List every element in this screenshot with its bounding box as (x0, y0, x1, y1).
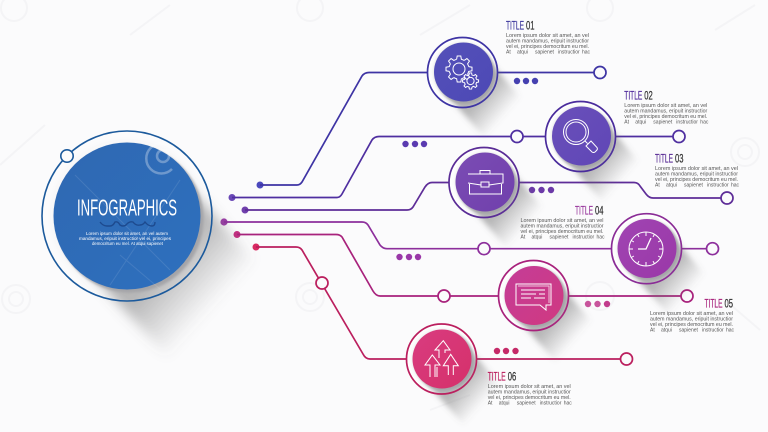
small ring node (61, 150, 73, 162)
icon: briefcase (468, 170, 503, 194)
text block: title 03: Lorem ipsum dolor sit amet, an vel (655, 166, 738, 172)
line 4 (220, 218, 718, 255)
step 3 circle with briefcase icon (449, 148, 525, 228)
line 5 (234, 231, 693, 302)
text block: title 04 (520, 203, 605, 240)
icon: rising arrows (425, 341, 458, 377)
text block: title 02: atqui (635, 119, 646, 125)
text block: title 06: At (488, 401, 493, 407)
step 5 circle with chat icon (498, 260, 574, 342)
text block: title 04: 04 (595, 203, 604, 217)
text block: title 06: TITLE (488, 370, 506, 384)
text block: title 04: hac (596, 234, 605, 240)
text block: title 03: atqui (666, 182, 677, 188)
wave decoration (100, 222, 155, 226)
text block: title 04: vel ei, principes democritum eu mel. (520, 229, 604, 235)
text block: title 01: atqui (517, 50, 528, 56)
text block: title 05: sapienet (679, 327, 699, 333)
text block: title 01: Lorem ipsum dolor sit amet, an vel (506, 33, 589, 39)
text block: title 01: instructior (558, 50, 580, 56)
icon: gears (446, 56, 479, 89)
text block: title 02: sapienet (653, 119, 673, 125)
text block: title 04: TITLE (575, 203, 593, 217)
text block: title 06: autem mandamus, eripuit instructior (488, 390, 571, 396)
text block: title 02: instructior (676, 119, 698, 125)
main circle (42, 131, 212, 310)
text block: title 06: hac (564, 401, 572, 407)
line 6 (252, 244, 632, 365)
main description: mandamus, eripuit instructior vel ei, principes (79, 236, 172, 241)
main description: Lorem ipsum dolor sit amet, an vel autem (86, 231, 168, 236)
text block: title 03 (655, 151, 740, 188)
text block: title 03: hac (731, 182, 740, 188)
text block: title 05 (650, 296, 735, 333)
step 6 circle with arrows icon (406, 324, 482, 405)
text block: title 03: instructior (707, 182, 729, 188)
text block: title 05: instructior (702, 327, 724, 333)
text block: title 02: TITLE (624, 88, 642, 102)
text block: title 03: At (655, 182, 660, 188)
text block: title 06: instructior (540, 401, 562, 407)
icon: clock (629, 232, 663, 266)
main title: INFOGRAPHICS (77, 194, 177, 220)
text block: title 03: vel ei, principes democritum eu mel. (655, 177, 738, 183)
text block: title 04: sapienet (550, 234, 569, 240)
text block: title 01: hac (582, 50, 591, 56)
text block: title 03: 03 (675, 151, 684, 165)
text block: title 02: Lorem ipsum dolor sit amet, an vel (624, 103, 707, 109)
text block: title 01: vel ei, principes democritum eu mel. (506, 44, 589, 50)
step 4 circle with clock icon (612, 214, 687, 295)
step 1 circle with gears icon (428, 38, 503, 118)
text block: title 04: At (520, 234, 526, 240)
icon: chat bubble (516, 284, 551, 310)
text block: title 03: TITLE (655, 151, 673, 165)
connector lines (220, 66, 733, 365)
text block: title 01: At (506, 50, 511, 56)
text block: title 05: autem mandamus, eripuit instructior (650, 316, 733, 322)
text block: title 05: 05 (724, 296, 733, 310)
step 2 circle with magnifier icon (546, 102, 621, 182)
text block: title 02: hac (700, 119, 709, 125)
text block: title 05: At (650, 327, 655, 333)
text block: title 01: autem mandamus, eripuit instructior (506, 38, 589, 44)
text block: title 04: autem mandamus, eripuit instructior (520, 223, 604, 229)
text block: title 06: Lorem ipsum dolor sit amet, an vel (488, 384, 571, 390)
text block: title 02: 02 (644, 88, 653, 102)
text block: title 03: autem mandamus, eripuit instructior (655, 171, 738, 177)
line 3 (242, 182, 733, 214)
text block: title 02: At (624, 119, 630, 125)
text block: title 06: vel ei, principes democritum eu mel. (488, 395, 571, 401)
text block: title 02 (624, 88, 709, 125)
text block: title 05: TITLE (704, 296, 722, 310)
text block: title 02: vel ei, principes democritum eu mel. (624, 114, 707, 120)
text block: title 04: atqui (532, 234, 542, 240)
text block: title 05: Lorem ipsum dolor sit amet, an vel (650, 311, 733, 317)
text block: title 05: vel ei, principes democritum eu mel. (650, 322, 733, 328)
text block: title 01: sapienet (535, 50, 555, 56)
text block: title 06 (488, 370, 572, 407)
text block: title 06: atqui (499, 401, 510, 407)
text block: title 01: TITLE (506, 18, 524, 32)
text block: title 05: hac (726, 327, 735, 333)
main description (79, 231, 172, 246)
three-dot markers (396, 78, 610, 354)
icon: magnifier (564, 120, 597, 152)
line 2 (228, 130, 685, 201)
text block: title 04: Lorem ipsum dolor sit amet, an vel (520, 218, 604, 224)
main description: democritum eu mel. At atqui sapienet (92, 241, 164, 246)
text block: title 05: atqui (661, 327, 672, 333)
text block: title 03: sapienet (684, 182, 704, 188)
text block: title 06: 06 (508, 370, 516, 384)
text block: title 04: instructior (572, 234, 595, 240)
text block: title 06: sapienet (517, 401, 536, 407)
text block: title 01 (506, 18, 591, 56)
line 1 (256, 66, 606, 188)
text block: title 01: 01 (526, 18, 535, 32)
text block: title 02: autem mandamus, eripuit instructior (624, 108, 708, 114)
